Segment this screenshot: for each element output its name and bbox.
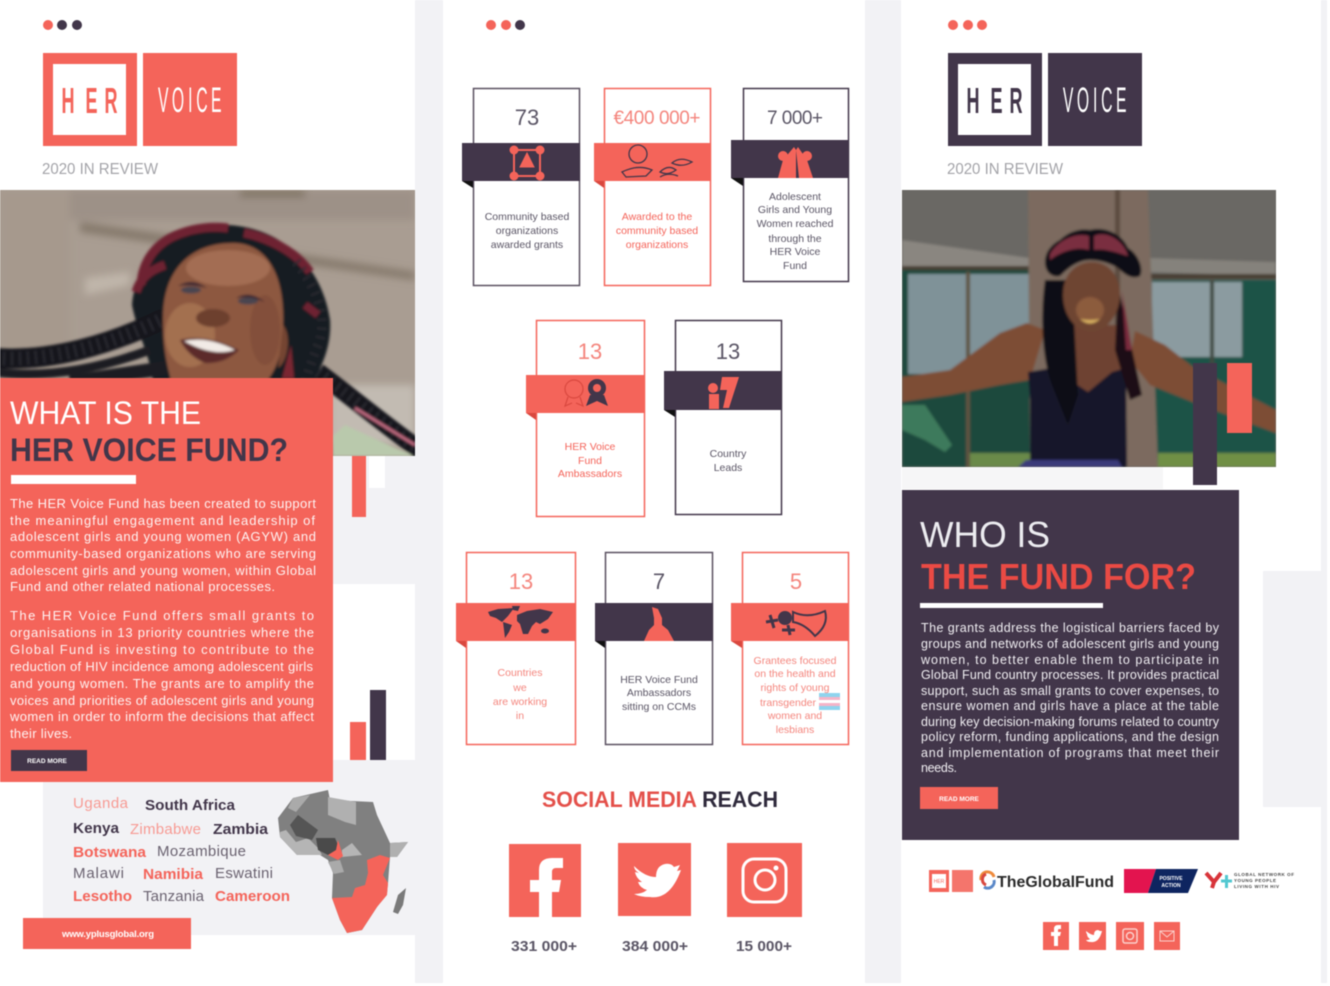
logo: HER VOICE dark: HER [966, 81, 1023, 122]
heading: the fund for: THE FUND FOR? [921, 556, 1196, 597]
button: website link [23, 918, 191, 949]
icon: transgender flag [819, 693, 840, 710]
logo: HER Voice small [929, 870, 973, 892]
stat card: 13 countries: Countries [498, 667, 542, 679]
stat card: 13 country leads: 13 [716, 339, 740, 364]
logo: Y+ global network: GLOBAL NETWORK OF [1234, 872, 1294, 877]
heading: social media reach: SOCIAL MEDIA REACH [542, 787, 778, 812]
subtitle: 2020 in review: 2020 IN REVIEW [947, 161, 1064, 178]
decorative bars beneath left photo [350, 456, 386, 760]
partner logos [929, 869, 1294, 893]
stat card: 5 grantees [731, 552, 849, 744]
stat card: 7 000 girls reached: Girls and Young [758, 204, 832, 216]
stat card: 73 organizations: organizations [496, 225, 558, 237]
body text: HER Voice Fund description: reduction of HIV incidence among adolescent girls [10, 659, 314, 674]
icon: person with flag [708, 377, 739, 409]
logo: positive action: POSITIVE [1159, 876, 1183, 882]
stat card: 7 000 girls reached: 7 000+ [767, 108, 823, 129]
logo: HER VOICE dark [948, 53, 1142, 146]
button: read more [920, 787, 998, 809]
country list: South Africa [145, 797, 236, 814]
country list: Kenya [73, 820, 120, 837]
body text: HER Voice Fund description: Global Fund is investing to contribute to the [10, 642, 314, 657]
subtitle: 2020 in review: 2020 IN REVIEW [42, 161, 159, 178]
icon: instagram [727, 843, 802, 917]
stat card: 7 000 girls reached: HER Voice [770, 246, 821, 258]
body text: HER Voice Fund description: The HER Voice Fund offers small grants to [10, 608, 314, 623]
heading: what is the: WHAT IS THE [10, 395, 201, 431]
country list: Zambia [213, 821, 269, 838]
icon: award ribbons [565, 379, 608, 406]
social buttons footer [1043, 922, 1180, 950]
black braids around face [296, 262, 322, 385]
social counts [511, 938, 792, 955]
stat card: 400 000 awarded: Awarded to the [622, 211, 692, 223]
panel: who is the fund for [902, 490, 1239, 840]
body text: who the fund is for: support, such as small grants to cover expenses, to [921, 684, 1219, 698]
icon: facebook small [1043, 922, 1069, 950]
body text: HER Voice Fund description: adolescent girls and young women, within Global [10, 563, 316, 578]
divider bar [11, 475, 136, 484]
stat card: 13 ambassadors: Ambassadors [558, 468, 622, 480]
body text: HER Voice Fund description: The HER Voice Fund has been created to support [10, 496, 316, 511]
logo: HER VOICE red [43, 53, 237, 146]
stat card: 13 ambassadors [526, 320, 645, 516]
stat card: 7 000 girls reached: Fund [783, 260, 807, 272]
body text: who the fund is for: policy reform, funding applications, and the design [921, 730, 1219, 744]
hair buns [1045, 229, 1141, 277]
stat card: 13 ambassadors: 13 [578, 339, 602, 364]
face [163, 243, 283, 395]
body text: HER Voice Fund description [9, 496, 316, 741]
social counts: 384 000+ [622, 938, 688, 955]
divider bar [920, 603, 1103, 608]
icon: twitter small [1079, 922, 1106, 950]
country list: Lesotho [73, 888, 132, 905]
logo: HER Voice small: HER [934, 879, 945, 885]
body text: who the fund is for [920, 621, 1220, 775]
progress dots: right panel [948, 20, 987, 30]
map: Africa with highlighted countries [278, 790, 408, 933]
logo: Global Fund swirl [981, 872, 994, 888]
body text: who the fund is for: Global Fund country processes. It provides practical [921, 668, 1219, 682]
heading: who is: WHO IS [920, 514, 1050, 555]
decorative bars on right photo [1193, 363, 1252, 485]
icon: twitter [618, 843, 691, 916]
body text: HER Voice Fund description: the meaningful engagement and leadership of [10, 513, 315, 528]
button: website link: www.yplusglobal.org [61, 929, 154, 940]
stat card: 13 ambassadors: HER Voice [565, 441, 616, 453]
stat card: 5 grantees: 5 [790, 569, 802, 594]
body text: who the fund is for: ensure women and girls have a place at the table [921, 699, 1219, 713]
stat card: 400 000 awarded: €400 000+ [614, 108, 700, 129]
progress dots: middle panel [486, 20, 525, 30]
logo: HER VOICE red: VOICE [158, 80, 222, 120]
button: read more: READ MORE [27, 758, 68, 765]
body text: HER Voice Fund description: their lives. [10, 726, 72, 741]
stat card: 5 grantees: lesbians [776, 724, 814, 736]
stat card: 7 000 girls reached: through the [768, 233, 822, 245]
stat card: 73 organizations: awarded grants [491, 239, 563, 251]
country list: Namibia [143, 866, 204, 883]
right lower braids [333, 425, 415, 456]
body text: who the fund is for: needs. [921, 761, 957, 775]
stat card: 7 000 girls reached: Women reached [757, 218, 834, 230]
stat card: 73 organizations [462, 88, 580, 286]
country list: Malawi [73, 865, 124, 882]
logo: positive action [1124, 869, 1198, 893]
body text: who the fund is for: during key decision-making forums related to country [921, 715, 1220, 729]
social counts: 331 000+ [511, 938, 577, 955]
icon: raised hand over group [644, 607, 674, 641]
stat card: 13 country leads [664, 320, 782, 514]
button: read more: READ MORE [939, 796, 980, 803]
stat card: 13 countries: in [516, 710, 524, 722]
stat card: 13 countries: are working [493, 696, 547, 708]
body text: HER Voice Fund description: Fund and other related national processes. [10, 579, 275, 594]
stat card: 7 000 girls reached: Adolescent [769, 191, 821, 203]
country list: Tanzania [143, 888, 205, 905]
stat card: 13 countries: we [512, 682, 527, 694]
logo: The Global Fund: TheGlobalFund [997, 874, 1114, 891]
country list: Mozambique [157, 843, 246, 860]
stat card: 13 country leads: Country [710, 448, 747, 460]
stat card: 7 ambassadors on CCMs: Ambassadors [627, 687, 691, 699]
button: read more [11, 750, 87, 771]
icon: gender symbols and flag [766, 611, 826, 636]
maroon top braids [141, 227, 228, 285]
stat card: 7 000 girls reached [731, 88, 849, 282]
stat card: 5 grantees: rights of young [761, 682, 830, 694]
photo: woman with arms outstretched [902, 190, 1276, 467]
stat card: 13 countries: 13 [509, 569, 533, 594]
body text: HER Voice Fund description: voices and priorities of adolescent girls and young [10, 693, 314, 708]
stat card: 7 ambassadors on CCMs: sitting on CCMs [622, 701, 696, 713]
stat card: 73 organizations: Community based [485, 211, 569, 223]
icon: world map [488, 606, 553, 638]
body text: HER Voice Fund description: organisations in 13 priority countries where the [10, 625, 314, 640]
stat card: 5 grantees: Grantees focused [754, 655, 837, 667]
stat card: 7 ambassadors on CCMs [595, 552, 713, 744]
heading: HER Voice Fund: HER VOICE FUND? [10, 432, 288, 468]
social counts: 15 000+ [736, 938, 792, 955]
icon: mail small [1154, 922, 1180, 950]
country list: Uganda [73, 795, 129, 812]
stat card: 400 000 awarded [594, 88, 711, 286]
icon: facebook [509, 844, 581, 917]
stat card: 5 grantees: on the health and [754, 668, 836, 680]
stat card: 7 ambassadors on CCMs: 7 [653, 569, 665, 594]
body text: HER Voice Fund description: women in order to inform the decisions that affect [9, 709, 314, 724]
country list: Eswatini [215, 865, 273, 882]
country list: Zimbabwe [130, 821, 201, 838]
photo: smiling woman with braids [0, 190, 420, 456]
stat card: 400 000 awarded: organizations [626, 239, 688, 251]
logo: HER VOICE dark: VOICE [1063, 80, 1127, 120]
body text: who the fund is for: groups and networks of adolescent girls and young [921, 637, 1219, 651]
panel: what is the HER Voice Fund [0, 378, 333, 782]
left braids [0, 318, 165, 359]
icon: instagram small [1116, 922, 1144, 950]
progress dots: left panel [43, 20, 82, 30]
body text: HER Voice Fund description: adolescent girls and young women (AGYW) and [10, 529, 316, 544]
icon: two girls high five [778, 147, 813, 178]
body text: who the fund is for: women, to better enable them to participate in [920, 653, 1219, 667]
stat card: 400 000 awarded: community based [616, 225, 698, 237]
body text: HER Voice Fund description: community-based organizations who are serving [10, 546, 316, 561]
hair mass [132, 225, 330, 395]
logo: Y+ global network [1206, 872, 1294, 889]
logo: Y+ global network: YOUNG PEOPLE [1234, 878, 1276, 883]
stat card: 5 grantees: women and [767, 710, 822, 722]
stat card: 13 country leads: Leads [714, 462, 742, 474]
stat card: 13 countries [456, 552, 576, 744]
logo: Y+ global network: LIVING WITH HIV [1234, 884, 1279, 889]
stat card: 5 grantees: transgender [760, 697, 817, 709]
country list: Cameroon [215, 888, 290, 905]
body text: who the fund is for: and implementation of programs that meet their [921, 746, 1219, 760]
logo: HER VOICE red: HER [62, 81, 118, 122]
icon: coin in hand and leaves [622, 145, 692, 177]
body text: who the fund is for: The grants address the logistical barriers faced by [921, 621, 1220, 635]
body text: HER Voice Fund description: and young women. The grants are to amplify the [10, 676, 314, 691]
stat card: 7 ambassadors on CCMs: HER Voice Fund [620, 674, 698, 686]
stat card: 13 ambassadors: Fund [578, 455, 602, 467]
icon: network [510, 146, 544, 180]
country list [73, 795, 290, 905]
country list: Botswana [73, 844, 147, 861]
logo: positive action: ACTION [1161, 883, 1181, 889]
stat card: 73 organizations: 73 [515, 105, 539, 130]
